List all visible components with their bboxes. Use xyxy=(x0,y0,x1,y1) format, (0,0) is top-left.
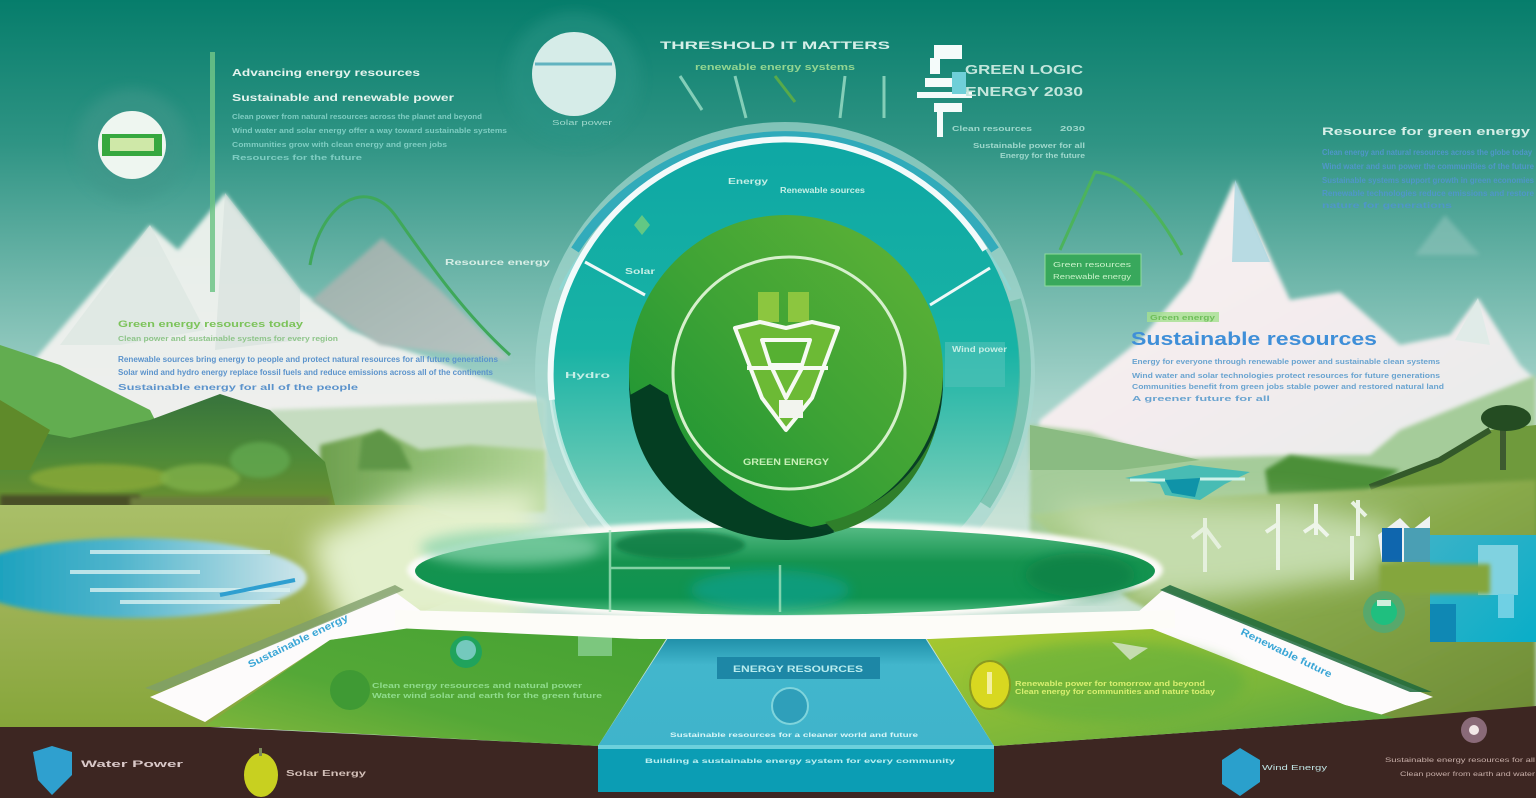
left mountain text block: Renewable sources bring energy to people and protect natural resources for all future generations xyxy=(118,355,499,364)
right green label: Renewable energy xyxy=(1053,274,1132,281)
icon: blue gem xyxy=(33,746,72,795)
mountains left xyxy=(0,193,545,470)
right mountain text block: Green energy xyxy=(1150,315,1215,322)
right green label: Green resources xyxy=(1053,262,1132,269)
globe labels: Solar xyxy=(625,267,655,276)
globe labels: Hydro xyxy=(565,371,610,380)
mountains right xyxy=(1030,180,1536,470)
left mid label: Resource energy xyxy=(445,258,551,267)
legend label two: Solar Energy xyxy=(286,769,367,778)
right heading block: Resource for green energy xyxy=(1322,126,1531,138)
right green label xyxy=(1045,254,1141,286)
podium heading bar: ENERGY RESOURCES xyxy=(733,664,863,674)
dark base strip xyxy=(0,706,1536,798)
connector lines to globe xyxy=(680,76,884,118)
icon: plug top xyxy=(758,292,809,322)
top-center heading: THRESHOLD IT MATTERS xyxy=(660,40,890,52)
right heading block xyxy=(1322,126,1535,210)
ground right xyxy=(1030,480,1536,727)
white beam right: Renewable future xyxy=(1239,627,1334,681)
legend label one: Water Power xyxy=(81,759,184,769)
platform ellipse xyxy=(395,520,1175,639)
ground left xyxy=(0,505,560,727)
icon: yellow coin xyxy=(970,661,1010,709)
floor text xyxy=(372,683,602,700)
left mountain text block: Solar wind and hydro energy replace fossil fuels and reduce emissions across all of the continents xyxy=(118,368,494,377)
icon: podium circle xyxy=(772,688,808,724)
icon: floor square xyxy=(578,636,612,656)
top-left heading: Sustainable and renewable power xyxy=(232,93,454,104)
top-left text: Clean power from natural resources across the planet and beyond xyxy=(232,114,482,121)
floor text right: Clean energy for communities and nature today xyxy=(1015,689,1215,696)
icon: crystal funnel xyxy=(735,322,838,430)
top-left text xyxy=(232,114,507,162)
top-left heading xyxy=(232,68,454,104)
top-left text: Wind water and solar energy offer a way toward sustainable systems xyxy=(232,128,507,135)
left mountain text block: Sustainable energy for all of the people xyxy=(118,383,359,392)
top-right text: Energy for the future xyxy=(1000,153,1085,160)
sphere label: GREEN ENERGY xyxy=(743,457,829,467)
icon: funnel tip xyxy=(779,400,803,418)
left mountain text block: Clean power and sustainable systems for every region xyxy=(118,336,338,343)
pale turbine meadow xyxy=(1050,505,1400,600)
globe labels: Renewable sources xyxy=(780,186,866,195)
right heading block: Wind water and sun power the communities of the future xyxy=(1322,162,1535,171)
right hills xyxy=(1030,375,1536,540)
right mountain text block: Sustainable resources xyxy=(1131,329,1377,349)
floor text right xyxy=(1015,681,1215,696)
central blue podium xyxy=(598,638,994,746)
right mountain text block: A greener future for all xyxy=(1132,394,1270,403)
left green arc xyxy=(310,197,510,355)
top circle callout xyxy=(508,12,640,144)
podium base: Building a sustainable energy system for every community xyxy=(645,759,956,765)
top-right text: Sustainable power for all xyxy=(973,143,1085,150)
top-right text: 2030 xyxy=(1060,126,1085,133)
right mountain text block xyxy=(1131,312,1444,403)
right green arc xyxy=(1060,172,1182,255)
right heading block: Sustainable systems support growth in green economies xyxy=(1322,176,1535,185)
white beam left: Sustainable energy xyxy=(246,612,351,671)
podium text line: Sustainable resources for a cleaner world and future xyxy=(670,733,919,739)
left hills xyxy=(0,345,545,512)
white beam right xyxy=(1120,585,1433,715)
right mountain text block: Energy for everyone through renewable power and sustainable clean systems xyxy=(1132,357,1440,366)
icon: green orb right xyxy=(1363,591,1405,633)
top-left heading: Advancing energy resources xyxy=(232,68,421,79)
icon: yellow lamp xyxy=(244,748,278,797)
icon: small leaf xyxy=(1112,642,1148,660)
solar blocks right xyxy=(1378,516,1536,642)
top-right heading: ENERGY 2030 xyxy=(965,84,1083,99)
top-right heading xyxy=(965,62,1084,99)
left mountain text block xyxy=(118,319,499,392)
pale glow left of platform xyxy=(310,490,540,640)
floor text right: Renewable power for tomorrow and beyond xyxy=(1015,681,1205,688)
floor panel: left green xyxy=(205,625,668,746)
lake xyxy=(0,538,307,618)
podium base xyxy=(598,745,994,792)
left mountain text block: Green energy resources today xyxy=(118,319,303,329)
top circle callout: Solar power xyxy=(552,120,613,127)
legend text right: Clean power from earth and water xyxy=(1400,772,1535,778)
top-right text: Clean resources xyxy=(952,126,1032,133)
top-right heading: GREEN LOGIC xyxy=(965,62,1084,77)
top-right text xyxy=(952,126,1085,160)
icon: tree xyxy=(1481,405,1531,470)
icon: left floor badge xyxy=(330,670,370,710)
top-center heading: renewable energy systems xyxy=(695,62,855,72)
icon: floor droplet xyxy=(450,636,482,668)
globe labels: Wind power xyxy=(952,345,1007,354)
legend text right: Sustainable energy resources for all xyxy=(1385,758,1535,764)
globe labels: Energy xyxy=(728,177,769,186)
right mountain text block: Communities benefit from green jobs stable power and restored natural land xyxy=(1132,382,1444,391)
globe segment lines xyxy=(585,262,990,305)
floor panel: right yellow green xyxy=(925,628,1395,746)
top-right logo icon xyxy=(917,45,972,137)
icon: blue gem right xyxy=(1222,748,1260,796)
inner ring xyxy=(673,257,905,489)
vertical green line xyxy=(210,52,215,292)
top-center heading xyxy=(660,40,890,72)
right mountain text block: Wind water and solar technologies protect resources for future generations xyxy=(1132,371,1440,380)
icon: globe leaf xyxy=(634,215,650,235)
globe labels xyxy=(565,177,1007,380)
central green sphere xyxy=(629,215,943,540)
top-left text: Resources for the future xyxy=(232,155,362,162)
floor text: Water wind solar and earth for the green future xyxy=(372,693,602,700)
legend label three: Wind Energy xyxy=(1262,765,1328,772)
wind turbines xyxy=(1192,500,1366,580)
top-left text: Communities grow with clean energy and green jobs xyxy=(232,142,447,149)
top badge: green halo xyxy=(76,89,188,201)
right heading block: nature for generations xyxy=(1322,201,1453,210)
white beam left xyxy=(145,585,440,722)
glass globe xyxy=(535,122,1035,622)
right teal pond xyxy=(1125,465,1250,500)
podium heading bar xyxy=(717,657,880,679)
floor text: Clean energy resources and natural power xyxy=(372,683,582,690)
right heading block: Renewable technologies reduce emissions and restore xyxy=(1322,189,1535,198)
legend text right xyxy=(1385,758,1535,778)
icon: flower badge xyxy=(1461,717,1487,743)
